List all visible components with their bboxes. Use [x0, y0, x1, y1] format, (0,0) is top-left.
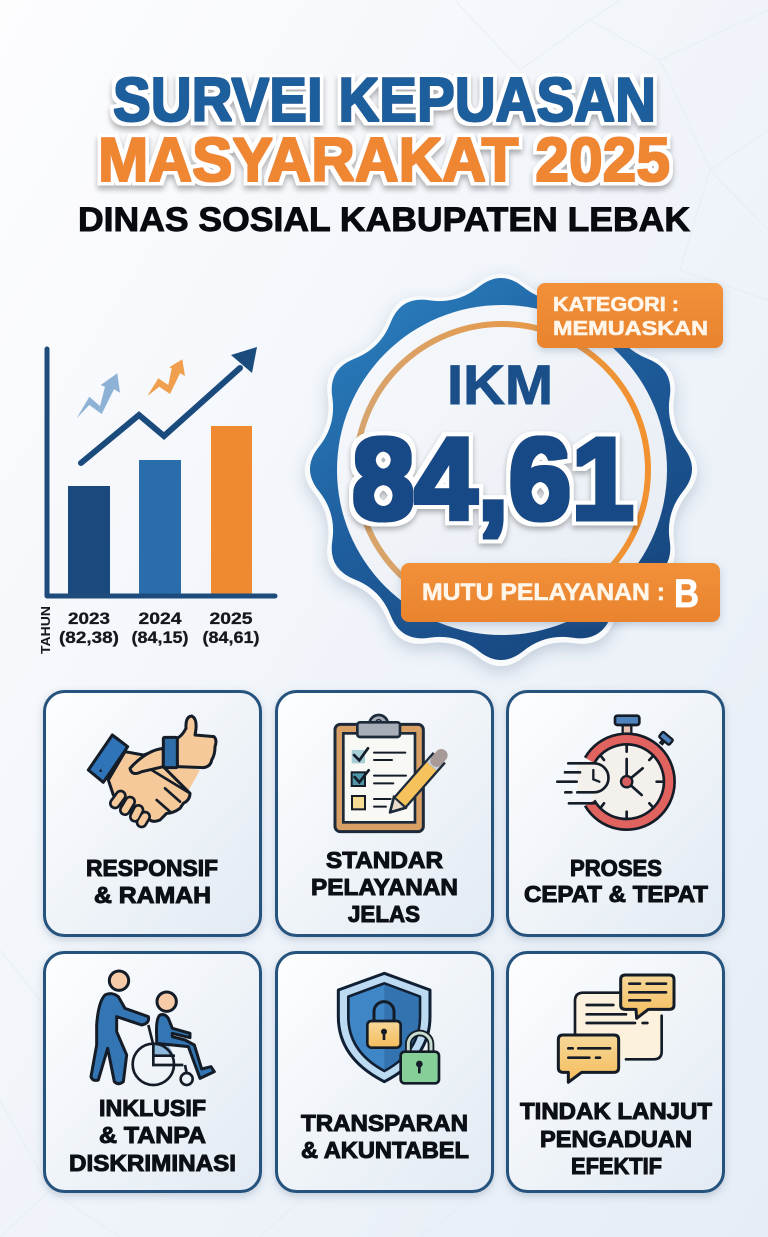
labels 2025: (84,61): [202, 628, 260, 647]
bar 2024: [139, 460, 181, 596]
card label: PELAYANAN: [311, 874, 458, 900]
labels 2024: (84,15): [132, 628, 188, 647]
card label: [311, 847, 458, 927]
labels 2024: [132, 609, 188, 647]
badge scalloped seal: [305, 274, 697, 666]
card label: [520, 1098, 712, 1179]
labels 2025: 2025: [210, 609, 252, 628]
callout: mutu pelayanan: [401, 563, 720, 622]
card: inklusif: [44, 952, 260, 1192]
card label: & TANPA: [99, 1122, 206, 1148]
card: standar pelayanan: [276, 692, 492, 936]
labels 2023: (82,38): [59, 628, 119, 647]
title: [78, 66, 690, 239]
bar 2025: [211, 426, 252, 596]
badge value: 84,61: [352, 414, 634, 544]
icon: shield and locks: [338, 973, 439, 1083]
trend arrow: [81, 347, 257, 463]
card label: PROSES: [570, 855, 662, 881]
badge label IKM: IKM: [447, 353, 553, 416]
card label: STANDAR: [326, 847, 443, 873]
small orange arrow: [147, 359, 185, 396]
icon: chat bubbles: [558, 975, 674, 1082]
card label: TRANSPARAN: [301, 1110, 468, 1136]
card label: [69, 1095, 236, 1176]
title line: masyarakat 2025: MASYARAKAT 2025: [98, 126, 670, 195]
IKM badge: [305, 274, 723, 666]
card label: [86, 855, 218, 908]
card label: RESPONSIF: [86, 855, 218, 881]
card label: INKLUSIF: [99, 1095, 206, 1121]
card label: [301, 1110, 469, 1163]
chart axes: [47, 349, 275, 596]
labels 2024: 2024: [138, 609, 182, 628]
card label: TINDAK LANJUT: [520, 1098, 712, 1124]
callout: mutu pelayanan: MUTU PELAYANAN :: [422, 579, 665, 606]
icon: handshake: [88, 716, 216, 822]
labels 2023: [59, 609, 119, 647]
card label: JELAS: [348, 901, 420, 927]
card: tindak lanjut: [508, 952, 724, 1192]
card: transparan: [276, 952, 492, 1192]
card label: EFEKTIF: [571, 1153, 662, 1179]
bar 2023: [68, 486, 110, 596]
callout: kategori: [537, 283, 723, 348]
card: responsif dan ramah: [44, 692, 260, 936]
card label: DISKRIMINASI: [69, 1150, 236, 1176]
small blue arrow: [77, 373, 120, 418]
icon: wheelchair assistance: [91, 971, 214, 1085]
icon: stopwatch: [557, 716, 673, 824]
title line: survei kepuasan: SURVEI KEPUASAN: [113, 66, 656, 135]
bar chart: IKM per year: [38, 347, 275, 654]
axis label: tahun: TAHUN: [38, 606, 53, 654]
labels 2025: [202, 609, 260, 647]
card: proses cepat: [508, 692, 724, 936]
callout: mutu pelayanan: B: [674, 572, 699, 616]
labels 2023: 2023: [68, 609, 110, 628]
callout: kategori: MEMUASKAN: [553, 318, 708, 340]
subtitle: DINAS SOSIAL KABUPATEN LEBAK: [78, 201, 690, 239]
card label: [524, 855, 708, 907]
card label: PENGADUAN: [540, 1126, 692, 1152]
icon: clipboard and pencil: [335, 715, 441, 832]
card label: CEPAT & TEPAT: [524, 881, 708, 907]
card label: & RAMAH: [94, 882, 211, 908]
card label: & AKUNTABEL: [301, 1137, 469, 1163]
callout: kategori: KATEGORI :: [553, 294, 679, 316]
